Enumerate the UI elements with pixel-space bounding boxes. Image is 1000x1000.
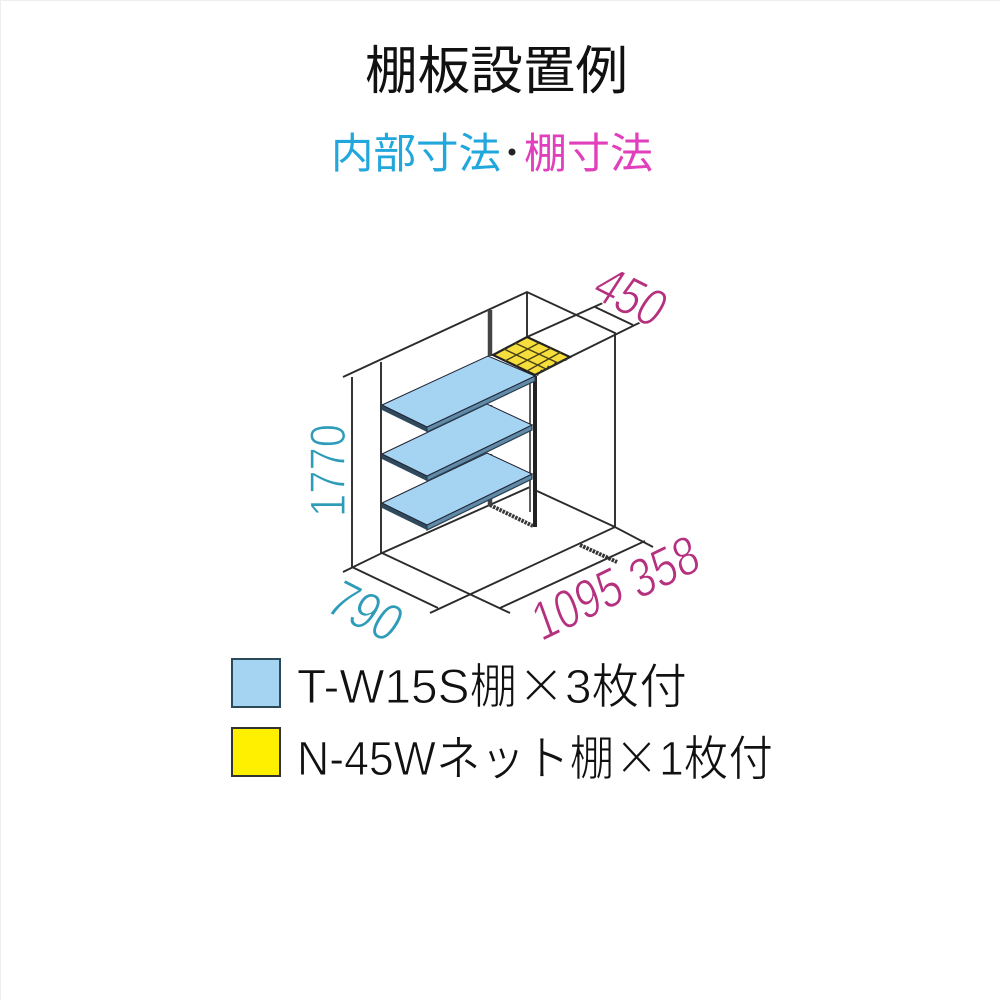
dimension: 790 depth: 790: [316, 570, 414, 653]
legend: blue shelf: [232, 647, 687, 717]
back post: [488, 310, 492, 356]
legend swatch: blue: [232, 659, 280, 707]
dimension: 450 shelf depth: 450: [582, 256, 678, 338]
blue shelf 3: [382, 453, 532, 530]
subtitle: interior and shelf dimensions: [331, 130, 653, 177]
storage unit diagram: [343, 292, 653, 613]
subtitle: interior and shelf dimensions: 棚寸法: [524, 130, 653, 177]
dimension: 1095 width: 1095: [525, 555, 631, 653]
legend label: blue shelf: T-W15S棚×3枚付: [297, 647, 687, 717]
legend: yellow net shelf: [232, 719, 773, 789]
legend swatch: yellow: [232, 728, 280, 776]
blue shelf 2: [382, 404, 532, 481]
cabinet outline and dimension lines: [343, 292, 653, 613]
blue shelf 1: [382, 356, 535, 432]
dimension: 358 width: 358: [622, 523, 707, 611]
bottom rails: [490, 505, 533, 526]
front post: [529, 376, 531, 512]
title: 棚板設置例: [365, 43, 628, 101]
subtitle: interior and shelf dimensions: 内部寸法: [331, 130, 501, 177]
legend label: yellow net shelf: N-45Wネット棚×1枚付: [297, 719, 773, 789]
yellow net shelf: [493, 337, 570, 376]
dimension: 1770 height: 1770: [300, 424, 356, 517]
